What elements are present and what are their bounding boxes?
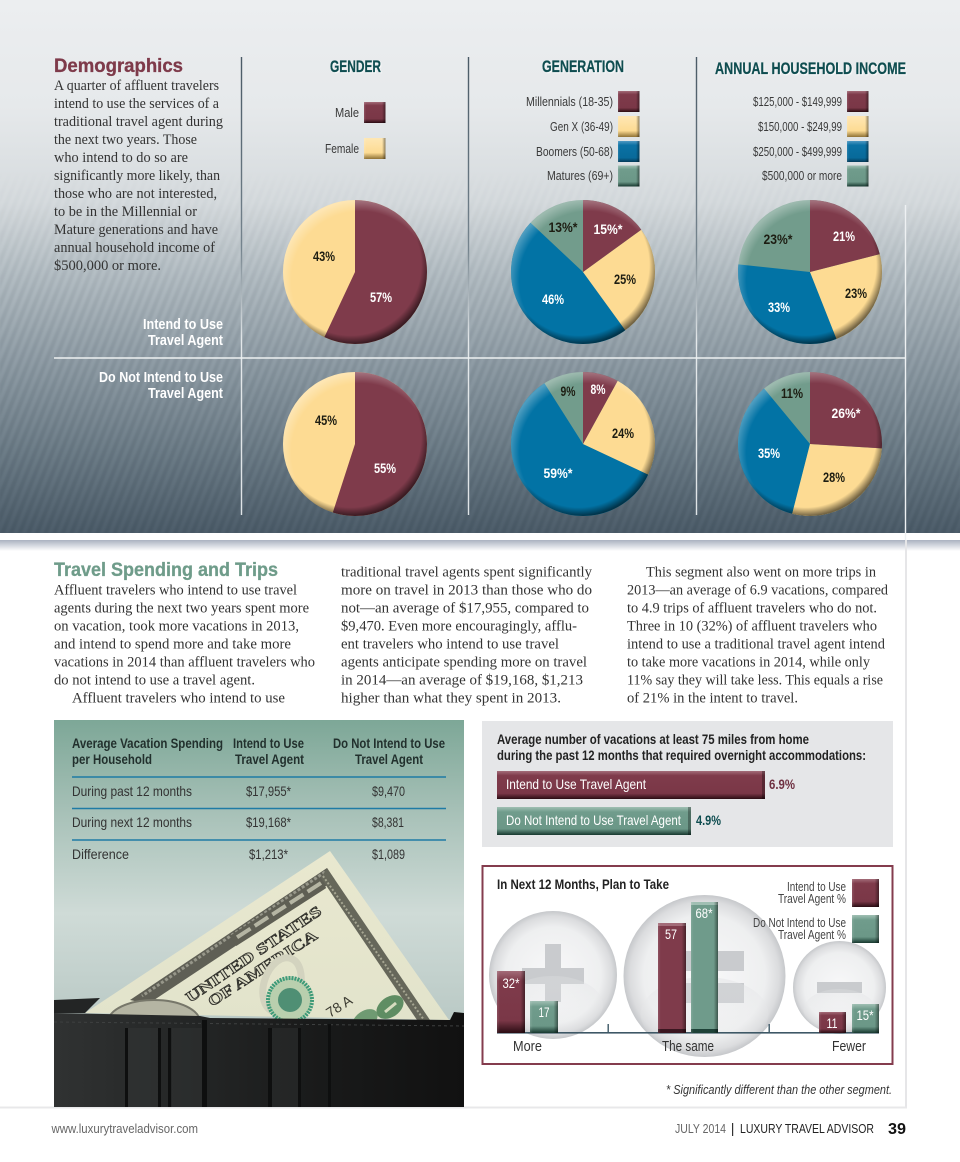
footnote: * Significantly different than the other segment.: [666, 1082, 892, 1097]
pie chart: generation, do not intend: [511, 372, 655, 516]
pie chart: generation, intend to use: [511, 200, 655, 344]
text block: demographics body: A quarter of affluent travelers: [54, 77, 219, 94]
legend: income: $500,000 or more: [762, 168, 842, 183]
bar group: More: More: [513, 1039, 542, 1055]
text block: article column 2: in 2014—an average of $19,168, $1,213: [341, 672, 583, 688]
table row: difference: $1,213*: [249, 846, 288, 862]
text block: demographics body: the next two years. Those: [54, 131, 197, 148]
pie chart: generation, do not intend: 9%: [560, 384, 576, 399]
text block: article column 3: to take more vacations in 2014, while only: [627, 654, 870, 670]
pie chart: generation, intend to use: 25%: [614, 272, 636, 287]
legend: income: [753, 91, 868, 186]
legend: plan to take: Intend to Use: [787, 880, 846, 894]
table header: Travel Agent: [235, 751, 304, 767]
pie chart: income, do not intend: 35%: [758, 446, 780, 461]
table row: during next 12 months: $19,168*: [246, 814, 291, 830]
table row: difference: Difference: [72, 846, 129, 862]
bar: Do Not Intend to Use Travel Agent 4.9%: Do Not Intend to Use Travel Agent: [506, 812, 681, 828]
bar: Intend to Use Travel Agent 6.9%: Intend to Use Travel Agent: [506, 776, 646, 792]
legend: generation: Boomers (50-68): [536, 144, 613, 159]
table header: per Household: [72, 751, 152, 767]
panel: average number of vacations: [482, 721, 893, 847]
heading: Travel Spending and Trips: Travel Spending and Trips: [54, 559, 278, 581]
text block: article column 3: [627, 564, 888, 706]
legend: generation: [526, 91, 640, 186]
row label: Intend to Use Travel Agent: Travel Agent: [148, 333, 223, 349]
pie chart: income, do not intend: [738, 372, 882, 516]
pie chart: income, intend to use: 23%: [845, 286, 867, 301]
header background band with diagonal stripes: [0, 0, 960, 551]
pie chart: generation, intend to use: 46%: [542, 292, 564, 307]
text block: article column 2: traditional travel agents spent significantly: [341, 564, 592, 580]
legend: gender: Female: [325, 141, 359, 156]
table row: difference: [72, 846, 405, 862]
icon: plus sphere: [489, 911, 617, 1039]
table row: during next 12 months: [72, 814, 404, 830]
pie chart: income, do not intend: 11%: [781, 386, 803, 401]
pie chart: income, intend to use: 23%*: [764, 232, 793, 247]
legend: generation: Gen X (36-49): [550, 119, 613, 134]
pie chart: gender, intend to use: 43%: [313, 249, 335, 264]
footer: www.luxurytraveladvisor.com: [51, 1121, 198, 1136]
bar: Do Not Intend to Use Travel Agent 4.9%: [497, 807, 721, 835]
table header: [72, 735, 445, 767]
bar: Do Not Intend to Use Travel Agent 4.9%: 4.9%: [696, 812, 721, 828]
text block: demographics body: intend to use the services of a: [54, 95, 219, 112]
pie chart: generation, do not intend: 24%: [612, 426, 634, 441]
footer: LUXURY TRAVEL ADVISOR: [740, 1121, 874, 1136]
bar group: More: 17: [538, 1004, 550, 1020]
text block: article column 2: [341, 564, 592, 706]
text block: demographics body: traditional travel agent during: [54, 113, 223, 130]
text block: article column 2: higher than what they spent in 2013.: [341, 690, 561, 706]
bar group: More: [497, 971, 558, 1055]
table header: Intend to Use: [233, 735, 304, 751]
column: gender: [283, 58, 427, 516]
pie chart: income, intend to use: [738, 200, 882, 344]
table header: Travel Agent: [355, 751, 423, 767]
legend: plan to take: Travel Agent %: [778, 892, 846, 906]
icon: equals sphere: [624, 895, 786, 1057]
text block: article column 1: vacations in 2014 than affluent travelers who: [54, 654, 315, 670]
row label: Do Not Intend to Use Travel Agent: Travel Agent: [148, 386, 223, 402]
table row: during past 12 months: During past 12 months: [72, 783, 192, 799]
footer: [51, 1121, 906, 1138]
bar group: The same: [658, 902, 718, 1055]
pie chart: income, intend to use: 33%: [768, 300, 790, 315]
text block: article column 3: of 21% in the intent to travel.: [627, 690, 798, 706]
chart title: Average number of vacations at least 75 miles from home: [497, 731, 809, 747]
chart title: [497, 731, 866, 763]
chart title: during the past 12 months that required overnight accommodations:: [497, 747, 866, 763]
column: annual household income: [715, 60, 906, 516]
icon: minus sphere: [793, 941, 886, 1034]
table row: during next 12 months: During next 12 months: [72, 814, 192, 830]
text block: demographics body: Mature generations and have: [54, 221, 218, 238]
illustration: dollar bill in wallet: [54, 851, 464, 1107]
text block: article column 2: ent travelers who intend to use travel: [341, 636, 559, 652]
text block: article column 1: agents during the next two years spent more: [54, 600, 309, 616]
pie chart: gender, do not intend: 55%: [374, 461, 396, 476]
footer: 39: [888, 1121, 906, 1138]
illustration: dollar bill in wallet: OF AMERICA: [205, 928, 321, 1010]
text block: article column 1: on vacation, took more vacations in 2013,: [54, 618, 299, 634]
row label: Do Not Intend to Use Travel Agent: Do Not Intend to Use: [99, 370, 223, 386]
table row: difference: $1,089: [372, 846, 405, 862]
pie chart: income, do not intend: 28%: [823, 470, 845, 485]
row label: Do Not Intend to Use Travel Agent: [99, 370, 223, 402]
pie chart: gender, intend to use: [283, 200, 427, 344]
pie chart: generation, intend to use: 13%*: [548, 220, 578, 235]
legend: plan to take: Do Not Intend to Use: [753, 916, 846, 930]
heading: GENDER: GENDER: [330, 58, 381, 76]
panel: vacation spending table with wallet photo: [54, 720, 464, 1107]
panel: demographics text: [54, 55, 223, 402]
text block: article column 3: 2013—an average of 6.9 vacations, compared: [627, 582, 888, 598]
axis: [497, 1024, 879, 1034]
text block: demographics body: [54, 77, 223, 274]
bar group: Fewer: Fewer: [832, 1039, 866, 1055]
bar group: Fewer: [819, 1004, 879, 1055]
text block: demographics body: annual household income of: [54, 239, 216, 256]
pie chart: generation, do not intend: 59%*: [544, 466, 573, 481]
text block: article column 2: more on travel in 2013 than those who do: [341, 582, 592, 598]
pie chart: gender, do not intend: 45%: [315, 413, 337, 428]
illustration: dollar bill in wallet: 78 A: [323, 991, 356, 1021]
bar group: The same: The same: [662, 1039, 714, 1055]
bar: Intend to Use Travel Agent 6.9%: 6.9%: [769, 776, 795, 792]
text block: article column 3: This segment also went on more trips in: [646, 564, 876, 580]
pie chart: income, intend to use: 21%: [833, 229, 855, 244]
pie chart: income, do not intend: 26%*: [832, 406, 861, 421]
text block: article column 1: and intend to spend more and take more: [54, 636, 291, 652]
legend: plan to take: Travel Agent %: [778, 928, 846, 942]
text block: article column 3: 11% say they will take less. This equals a rise: [627, 672, 883, 688]
legend: generation: Matures (69+): [547, 168, 613, 183]
row label: Intend to Use Travel Agent: Intend to Use: [143, 317, 223, 333]
text block: article column 2: not—an average of $17,955, compared to: [341, 600, 589, 616]
legend: generation: Millennials (18-35): [526, 94, 613, 109]
text block: article column 3: to 4.9 trips of affluent travelers who do not.: [627, 600, 877, 616]
bar group: The same: 57: [665, 926, 677, 942]
table row: during next 12 months: $8,381: [372, 814, 404, 830]
pie chart: gender, intend to use: 57%: [370, 290, 392, 305]
legend: plan to take: [753, 879, 879, 943]
panel: in next 12 months, plan to take: [482, 866, 892, 1064]
bar: Intend to Use Travel Agent 6.9%: [497, 771, 795, 799]
bar group: The same: 68*: [696, 905, 713, 921]
pie chart: generation, do not intend: 8%: [590, 382, 606, 397]
legend: gender: [325, 102, 386, 159]
table row: during past 12 months: $17,955*: [246, 783, 291, 799]
pie chart: gender, do not intend: [283, 372, 427, 516]
legend: income: $250,000 - $499,999: [753, 144, 842, 159]
text block: article column 3: Three in 10 (32%) of affluent travelers who: [627, 618, 877, 634]
text block: article column 1: [54, 582, 315, 706]
bar group: More: 32*: [502, 975, 520, 991]
column: generation: [511, 58, 655, 516]
text block: article column 3: intend to use a traditional travel agent intend: [627, 636, 885, 652]
illustration: dollar bill in wallet: UNITED STATES: [183, 904, 325, 1006]
footer: JULY 2014: [675, 1121, 726, 1136]
table header: Average Vacation Spending: [72, 735, 223, 751]
text block: demographics body: those who are not interested,: [54, 185, 217, 202]
text block: demographics body: significantly more likely, than: [54, 167, 220, 184]
text block: article column 1: Affluent travelers who intend to use travel: [54, 582, 297, 598]
chart title: In Next 12 Months, Plan to Take: [497, 876, 669, 892]
row label: Intend to Use Travel Agent: [143, 317, 223, 349]
bar group: Fewer: 11: [826, 1015, 838, 1031]
table header: Do Not Intend to Use: [333, 735, 445, 751]
legend: income: $150,000 - $249,99: [758, 119, 842, 134]
text block: article column 1: Affluent travelers who intend to use: [72, 690, 285, 706]
text block: demographics body: who intend to do so are: [54, 149, 188, 166]
heading: GENERATION: GENERATION: [542, 58, 624, 76]
legend: gender: Male: [335, 105, 359, 120]
text block: article column 2: agents anticipate spending more on travel: [341, 654, 587, 670]
table row: during past 12 months: $9,470: [372, 783, 405, 799]
heading: ANNUAL HOUSEHOLD INCOME: ANNUAL HOUSEHOLD INCOME: [715, 60, 906, 78]
text block: article column 1: do not intend to use a travel agent.: [54, 672, 255, 688]
text block: demographics body: to be in the Millennial or: [54, 203, 197, 220]
bar group: Fewer: 15*: [856, 1007, 874, 1023]
pie chart: generation, intend to use: 15%*: [594, 222, 623, 237]
text block: article column 2: $9,470. Even more encouragingly, afflu-: [341, 618, 577, 634]
legend: income: $125,000 - $149,999: [753, 94, 842, 109]
text block: demographics body: $500,000 or more.: [54, 257, 161, 274]
table row: during past 12 months: [72, 783, 405, 799]
heading: Demographics: Demographics: [54, 55, 183, 77]
